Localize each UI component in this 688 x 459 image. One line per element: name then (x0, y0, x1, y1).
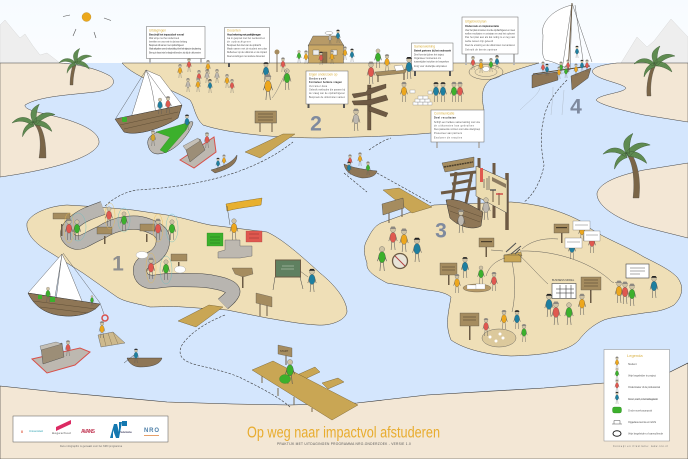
board: uitgebreid plan: welke resultaten er ontstaan en wat het oplevert (465, 32, 515, 36)
board: uitgebreid plan (462, 17, 518, 65)
board: docenten (224, 28, 270, 67)
board: uitdagingen (146, 26, 205, 64)
board: uitdagingen: Wat wil je met het onderzoek (149, 37, 180, 40)
team at compass (377, 226, 421, 271)
board: docenten: Houd rekening met praktijkvragen (227, 34, 262, 36)
logos: II (21, 429, 23, 434)
palm tree D (603, 133, 650, 198)
palm tree C (634, 46, 675, 96)
board: eigen onderzoek: Onderzoek (309, 78, 327, 80)
start jetty: START (280, 349, 289, 353)
island 2: central beach (122, 63, 539, 138)
board: docenten: Bespreek het doel van de opdracht (227, 44, 261, 47)
logos: NRO (144, 428, 159, 434)
legend (604, 350, 670, 441)
sign jetty island 3 (382, 198, 404, 223)
board: uitdagingen: bereiken en voor wie is dat van belang (149, 40, 188, 44)
jetty island 1 (178, 305, 223, 327)
island 3 (364, 202, 682, 356)
logos: AVANS (81, 429, 96, 435)
board: uitgebreid plan: welke lessen zijn geleerd (465, 40, 494, 43)
title: Op weg naar impactvol afstuderen (247, 424, 440, 442)
sign: whiteboard group (581, 277, 601, 303)
board: samenwerking: Samenwerking (414, 44, 435, 48)
mountains left (0, 20, 60, 63)
legend row: tool: Vrije begeleider of aanvullende (628, 432, 664, 436)
logos (13, 416, 168, 442)
bottom beach (0, 363, 688, 459)
board: uitgebreid plan: Onderzoek en implementatie (465, 25, 500, 28)
board: samenwerking: Zorg voor duidelijke afspraken (414, 65, 448, 68)
whiteboard group (545, 279, 586, 325)
logos: Hogeschool (52, 431, 71, 435)
raft (98, 321, 125, 347)
palm tree A (59, 48, 92, 85)
pairs on road (64, 203, 186, 284)
board: communicatie: Evalueer de reacties (434, 136, 463, 140)
start jetty (252, 345, 358, 420)
legend: Legenda (627, 353, 643, 358)
board: docenten: Ga in gesprek met het werkveld en (227, 37, 266, 40)
board: eigen onderzoek: Verzamel data (309, 85, 328, 88)
subtitle: PRAKTIJK MET UITDAGINGEN PROGRAMMA NRO-ONDERZOEK - VERSIE 1.0 (277, 442, 411, 446)
palm tree B (12, 104, 55, 158)
board: communicatie: Presenteer aan partners (434, 132, 463, 135)
board: eigen onderzoek: de vraag van de opdrachtgever (309, 92, 345, 95)
board: samenwerking: tussentijdse inzichten te bespreken (414, 60, 450, 64)
banner and podium (207, 198, 262, 258)
dashed routes (105, 80, 567, 407)
island 1 (27, 205, 347, 325)
sign island 2 (255, 111, 276, 132)
number 3: 3 (435, 220, 447, 242)
sky background (0, 0, 688, 64)
red boat top (180, 132, 216, 168)
sailboat top (115, 70, 182, 133)
board: uitgebreid plan: Gebruik de kennis opnieuw (465, 48, 497, 52)
island: top right beach (592, 63, 688, 122)
table group (454, 257, 497, 293)
road on island 1 (67, 208, 233, 304)
house (297, 30, 354, 65)
board: samenwerking: Betrek partners bij het onderzoek (414, 50, 452, 52)
red boat left (32, 340, 90, 373)
toolbox connector lines (486, 239, 619, 312)
board: eigen onderzoek: Eigen onderzoek op (309, 72, 338, 76)
ship under construction (441, 157, 507, 233)
board: communicatie: de uitkomsten kan gebruiken (434, 124, 475, 128)
person by signpost (352, 109, 360, 131)
catamaran (520, 3, 592, 115)
number 4: 4 (570, 96, 582, 118)
boat mid (344, 153, 377, 178)
number 1: 1 (112, 252, 124, 276)
canoe left (124, 349, 162, 367)
whiteboard group: BUSINESS MODEL (552, 279, 575, 282)
number 2: 2 (310, 112, 322, 136)
board: uitdagingen: Beschrijf het impactdoel vooraf (149, 34, 184, 36)
sign: bottom group (460, 313, 479, 340)
presentation group (615, 264, 658, 306)
island: top left beach (0, 63, 114, 177)
board: uitdagingen: Maak afspraken over de rolverdeling in het hele traject en de planning (149, 48, 202, 50)
canoe top (211, 155, 237, 173)
board: samenwerking (412, 43, 453, 76)
circle of people (469, 55, 503, 80)
icon: sun (63, 12, 111, 38)
green boat (148, 115, 193, 154)
board: uitgebreid plan: Voer het plan uit samen met de opdrachtgever en meet (465, 29, 515, 32)
signs on road (53, 213, 187, 270)
board: eigen onderzoek: Formuleer heldere vragen (309, 81, 343, 84)
signpost (352, 84, 388, 130)
board: samenwerking: Deel kennis tijdens het traject (414, 54, 444, 56)
board: uitgebreid plan: Deel de ervaring en de uitkomsten met anderen (465, 44, 516, 47)
island: middle right beach (597, 163, 688, 238)
table with people (367, 49, 413, 84)
legend credit: Concept en illustratie: www.nro.nl (613, 445, 668, 448)
board: docenten: Reflecteer op de uitkomst en de impact (227, 51, 267, 54)
sign: signs island 1 (232, 268, 272, 316)
board: docenten: Docenten (227, 28, 241, 32)
board: eigen onderzoek: Bespreek de uitkomsten samen (309, 96, 346, 99)
board: docenten: de opdrachtgever (227, 40, 251, 44)
legend row: book: Opgedane kennis en inzicht (628, 421, 656, 424)
board: samenwerking: Organiseer momenten om (414, 57, 441, 60)
board: uitdagingen: Uitdagingen (149, 28, 166, 32)
toolbox (504, 243, 522, 262)
group with posters (565, 221, 600, 259)
bricks and people (400, 82, 464, 105)
board: eigen onderzoek (306, 71, 348, 108)
logos: Nederlandse (120, 431, 133, 434)
board: communicatie (431, 110, 484, 148)
legend row: green bag: Onderzoeksaanpak (628, 410, 653, 412)
board: docenten: Maak samen met de student een plan (227, 48, 268, 50)
chalkboard and teacher (273, 260, 316, 292)
legend row: green person: Vrije begeleider in project (628, 374, 656, 378)
mountains right (621, 19, 688, 63)
board: communicatie: Kies passende vormen voor elke doelgroep (434, 128, 481, 131)
sign: table group (440, 263, 457, 285)
crowd: group discussion island 2 (178, 58, 234, 93)
sign: toolbox left (479, 238, 494, 257)
board: communicatie: Deel resultaten (434, 116, 457, 120)
board: communicatie: Communicatie (434, 112, 455, 116)
board: uitdagingen: Breng in kaart wie belanghebbenden zijn bij de uitkomsten (149, 52, 202, 54)
board: communicatie: Schrijf een heldere samenvatting voor wie (434, 121, 481, 124)
sign: top right group (554, 224, 569, 243)
legend row: blue person: Docent, coach, onderzoekbegeleider (628, 398, 658, 401)
board: uitgebreid plan: Pas het plan aan als dat nodig is en leg vast (465, 36, 515, 39)
sailboat left (28, 253, 108, 321)
logos: Universiteit (29, 429, 43, 433)
group: dancing people (262, 50, 291, 100)
bottom group (482, 310, 527, 347)
board: eigen onderzoek: Gebruik methoden die passen bij (309, 88, 345, 92)
legend row: red person: Onderzoeker of de professional (628, 386, 660, 389)
jetty island 2 (245, 134, 295, 158)
board: uitdagingen: Bespreek dit samen met opdrachtgever (149, 44, 184, 47)
board: uitgebreid plan: Uitgebreid plan (465, 20, 487, 24)
credits: Deze infographic is gemaakt voor het NRO programma (60, 445, 123, 448)
legend row: orange person: Student (628, 363, 637, 366)
jetty island 3 (383, 188, 432, 213)
board: docenten: Deel ervaringen met andere docenten (227, 55, 266, 58)
